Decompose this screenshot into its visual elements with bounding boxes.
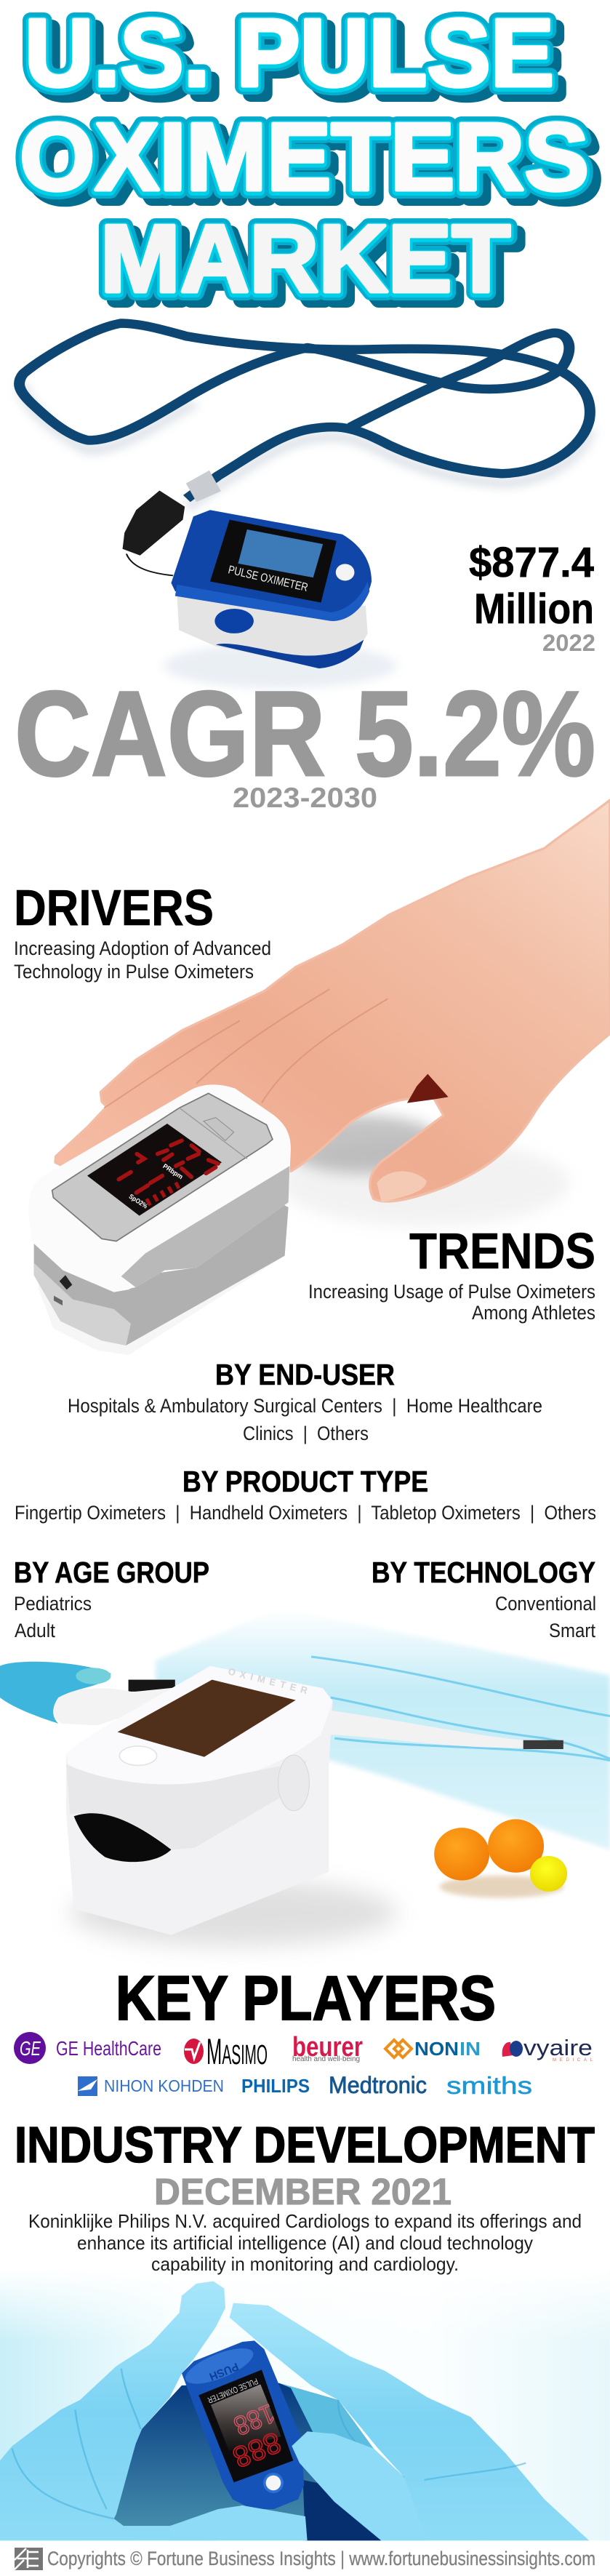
logo: Nihon Kohden: NIHON KOHDEN	[104, 2076, 224, 2095]
title: OXIMETERS	[28, 111, 597, 218]
photo: gloved hands holding oximeter	[0, 2269, 610, 2540]
logo: Vyaire: MEDICAL	[553, 2058, 593, 2063]
panel: trends	[308, 1223, 595, 1324]
title: MARKET	[100, 206, 510, 313]
CAGR: 2023-2030	[233, 783, 377, 814]
photo: gloved hands holding oximeter: 888	[228, 2425, 285, 2473]
title	[20, 0, 597, 320]
segment: by product type: BY PRODUCT TYPE	[182, 1465, 428, 1498]
logo: Vyaire	[502, 2035, 593, 2063]
body text: enhance its artificial intelligence (AI) and cloud technology	[77, 2232, 533, 2254]
heading: drivers: DRIVERS	[14, 879, 214, 936]
market size value: $877.4	[469, 539, 594, 586]
logos: key players	[14, 2031, 593, 2099]
title: MARKET	[100, 207, 510, 313]
photo: hand with oximeter: SpO2%	[128, 1193, 149, 1210]
segment: by product type	[15, 1465, 596, 1524]
title: U.S. PULSE	[25, 0, 554, 106]
title: MARKET	[108, 213, 518, 320]
photo: hand with oximeter	[28, 800, 610, 1355]
logo: GE HealthCare	[14, 2032, 161, 2064]
photo: gloved hands holding oximeter: PULSE OXIMETER	[206, 2376, 260, 2406]
logo: Masimo: MASIMO	[206, 2031, 268, 2072]
logo: GE HealthCare: GE HealthCare	[56, 2037, 161, 2060]
logo: Smiths: smiths	[446, 2072, 532, 2099]
market size value: Million	[474, 585, 594, 633]
body text	[28, 2210, 582, 2275]
photo: gloved hands holding oximeter: PUSH	[207, 2360, 240, 2383]
segment: by end-user: Clinics | Others	[243, 1423, 369, 1444]
segment: by technology	[372, 1556, 596, 1641]
segment: by age group: Adult	[15, 1620, 55, 1641]
device label: PULSE OXIMETER	[227, 564, 309, 594]
icon: Fortune Business Insights logo	[15, 2548, 43, 2570]
segment: by age group	[14, 1556, 209, 1641]
market size value	[469, 539, 595, 656]
panel: drivers	[14, 879, 271, 983]
segment: by age group: BY AGE GROUP	[14, 1556, 209, 1589]
title: U.S. PULSE	[25, 1, 554, 108]
body text: Koninklijke Philips N.V. acquired Cardiologs to expand its offerings and	[28, 2210, 582, 2232]
logo: GE HealthCare: GE	[20, 2037, 41, 2060]
logo: beurer: beurer	[292, 2032, 363, 2063]
heading: key players: KEY PLAYERS	[116, 1964, 496, 2033]
segment: by end-user	[68, 1358, 542, 1444]
oximeter body	[34, 1205, 289, 1355]
segment: by end-user: Hospitals & Ambulatory Surgical Centers | Home Healthcare	[68, 1395, 542, 1417]
logo: Nonin	[385, 2038, 481, 2060]
logo: Vyaire: vyaire	[523, 2035, 593, 2060]
title: MARKET	[100, 205, 510, 312]
logo: Philips: PHILIPS	[241, 2075, 310, 2097]
footer	[15, 2548, 595, 2570]
photo: oximeter with lanyard	[20, 324, 590, 689]
panel: drivers: Technology in Pulse Oximeters	[14, 961, 254, 983]
logo: Nonin: NON	[414, 2038, 459, 2060]
photo: hand with oximeter: PRbpm	[161, 1162, 184, 1180]
date: DECEMBER 2021	[154, 2171, 452, 2212]
logo: Masimo	[184, 2031, 268, 2072]
photo: oximeter, mask and thermometer	[0, 1609, 610, 1946]
title: OXIMETERS	[20, 103, 589, 210]
logo: Nonin: IN	[459, 2038, 481, 2060]
logo: Medtronic: Medtronic	[329, 2072, 427, 2098]
title: OXIMETERS	[20, 104, 589, 211]
market size value: 2022	[542, 630, 595, 656]
segment: by technology: Smart	[549, 1620, 595, 1641]
segment: by technology: Conventional	[495, 1593, 596, 1615]
title: OXIMETERS	[20, 105, 589, 212]
segment: by end-user: BY END-USER	[215, 1358, 395, 1391]
photo: gloved hands holding oximeter: 188	[230, 2399, 279, 2441]
panel: trends: Among Athletes	[472, 1302, 595, 1324]
body text: capability in monitoring and cardiology.	[151, 2253, 459, 2275]
title: U.S. PULSE	[33, 7, 562, 114]
panel: industry development	[15, 2116, 595, 2275]
logo: beurer: health and well-being	[292, 2055, 360, 2063]
segment: by age group: Pediatrics	[14, 1593, 92, 1615]
panel: drivers: Increasing Adoption of Advanced	[14, 937, 271, 959]
title: U.S. PULSE	[25, 0, 554, 107]
device engraved label: OXIMETER	[227, 1665, 309, 1696]
